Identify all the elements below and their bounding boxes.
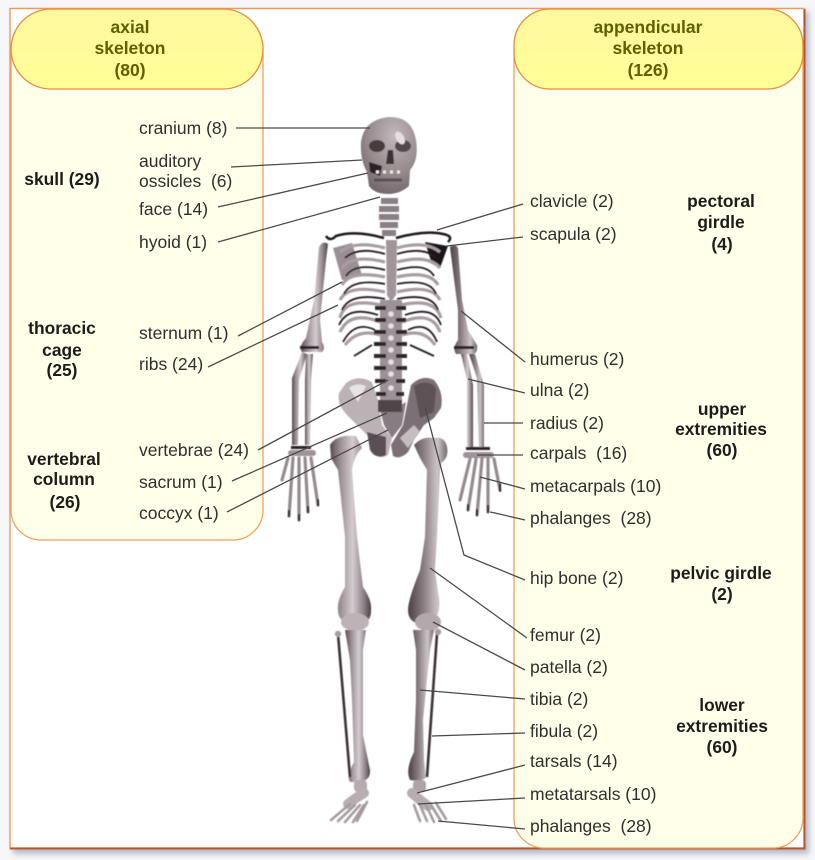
labels: axial bones: sternum (1) — [139, 323, 228, 343]
labels: appendicular bones: ulna (2) — [530, 380, 589, 400]
panel: axial skeleton — [11, 9, 263, 540]
leader lines: axial — [208, 128, 388, 512]
panel: appendicular skeleton — [514, 9, 803, 848]
labels: appendicular bones: radius (2) — [530, 413, 604, 433]
axial header pill: axial — [111, 17, 149, 37]
group label: vertebral column: (26) — [50, 492, 80, 512]
labels: appendicular bones: femur (2) — [530, 625, 601, 645]
skeleton illustration — [282, 117, 500, 822]
group label: vertebral column: vertebral — [27, 449, 101, 469]
labels: appendicular bones: humerus (2) — [530, 349, 624, 369]
appendicular header pill: skeleton — [612, 38, 684, 58]
labels: appendicular bones: clavicle (2) — [530, 191, 614, 211]
labels: appendicular bones: patella (2) — [530, 657, 608, 677]
group label: lower extremities — [676, 695, 768, 757]
labels: axial bones: hyoid (1) — [139, 232, 207, 252]
appendicular header pill — [514, 9, 803, 89]
clavicles — [326, 233, 450, 242]
group label: upper extremities — [675, 399, 767, 460]
appendicular header pill: appendicular — [594, 17, 703, 37]
group label: thoracic cage: (25) — [47, 360, 77, 380]
group label: upper extremities: (60) — [707, 440, 737, 460]
labels: axial bones — [139, 118, 249, 523]
labels: appendicular bones: hip bone (2) — [530, 568, 623, 588]
labels: axial bones: sacrum (1) — [139, 472, 223, 492]
labels: axial bones: cranium (8) — [139, 118, 228, 138]
labels: appendicular bones — [530, 191, 661, 836]
group label: pelvic girdle — [670, 563, 772, 604]
group label: lower extremities: extremities — [676, 716, 768, 736]
group label: thoracic cage: thoracic — [28, 318, 96, 338]
labels: axial bones: ossicles (6) — [139, 171, 232, 191]
labels: appendicular bones: phalanges (28) — [530, 816, 652, 836]
axial header pill — [11, 9, 263, 89]
legs — [330, 436, 447, 792]
axial header pill: (80) — [114, 60, 146, 80]
labels: axial bones: face (14) — [139, 199, 208, 219]
labels: appendicular bones: phalanges (28) — [530, 508, 652, 528]
group label: skull: skull (29) — [24, 169, 100, 189]
labels: appendicular bones: fibula (2) — [530, 721, 598, 741]
group label: pelvic girdle: pelvic girdle — [670, 563, 772, 583]
labels: appendicular bones: carpals (16) — [530, 443, 627, 463]
group label: thoracic cage: cage — [42, 340, 82, 360]
group label: upper extremities: upper — [698, 399, 746, 419]
group label: pectoral girdle — [687, 191, 755, 254]
labels: appendicular bones: metatarsals (10) — [530, 784, 656, 804]
group label: lower extremities: (60) — [707, 737, 737, 757]
appendicular header pill: (126) — [628, 60, 668, 80]
group label: vertebral column: column — [33, 469, 95, 489]
arms — [291, 243, 490, 450]
labels: appendicular bones: tarsals (14) — [530, 751, 618, 771]
labels: appendicular bones: metacarpals (10) — [530, 476, 661, 496]
feet — [331, 793, 446, 822]
labels: axial bones: auditory — [139, 151, 202, 171]
pelvis — [338, 378, 442, 457]
hands — [282, 453, 500, 520]
skull — [361, 117, 417, 194]
group label: pectoral girdle: (4) — [711, 234, 733, 254]
group label: pectoral girdle: pectoral — [687, 191, 755, 211]
group label: pectoral girdle: girdle — [697, 212, 745, 232]
labels: axial bones: ribs (24) — [139, 354, 203, 374]
group label: pelvic girdle: (2) — [711, 584, 733, 604]
group label: lower extremities: lower — [699, 695, 745, 715]
group label: thoracic cage — [28, 318, 96, 380]
group label: upper extremities: extremities — [675, 419, 767, 439]
axial header pill: skeleton — [94, 38, 166, 58]
labels: axial bones: vertebrae (24) — [139, 440, 249, 460]
group label: vertebral column — [27, 449, 101, 512]
spine — [374, 198, 407, 412]
rib cage — [333, 240, 448, 356]
labels: appendicular bones: scapula (2) — [530, 224, 617, 244]
labels: appendicular bones: tibia (2) — [530, 689, 588, 709]
leader lines: appendicular — [417, 204, 527, 829]
labels: axial bones: coccyx (1) — [139, 503, 219, 523]
